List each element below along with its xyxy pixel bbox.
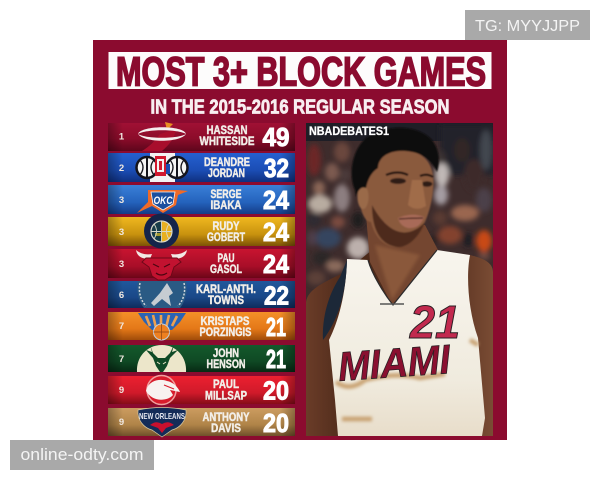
row 2: DeAndre Jordan: 2 bbox=[119, 163, 124, 174]
icon: New Orleans Pelicans logo: NEW ORLEANS bbox=[139, 411, 185, 421]
row 10: Anthony Davis: 9 bbox=[119, 417, 124, 428]
row 8: John Henson: JOHN bbox=[213, 348, 239, 360]
icon: Miami Heat logo bbox=[138, 122, 186, 151]
icon: LA Clippers logo bbox=[136, 153, 188, 182]
row 1: Hassan Whiteside: 1 bbox=[119, 132, 125, 142]
row 2: DeAndre Jordan bbox=[108, 153, 295, 183]
icon: Minnesota Timberwolves logo bbox=[137, 281, 187, 308]
icon: Utah Jazz logo bbox=[144, 214, 179, 248]
row 5: Pau Gasol: 3 bbox=[119, 259, 124, 270]
row 9: Paul Millsap: 20 bbox=[263, 378, 289, 406]
row 6: Karl-Anthony Towns: 6 bbox=[119, 290, 124, 301]
row 4: Rudy Gobert: GOBERT bbox=[207, 232, 245, 244]
row 7: Kristaps Porzingis: 7 bbox=[119, 321, 124, 332]
row 4: Rudy Gobert bbox=[108, 214, 295, 248]
row 6: Karl-Anthony Towns bbox=[108, 281, 295, 310]
row 9: Paul Millsap bbox=[108, 376, 295, 406]
panel: crimson poster background bbox=[93, 40, 507, 440]
row 10: Anthony Davis: 20 bbox=[263, 410, 289, 438]
row 9: Paul Millsap: PAUL bbox=[213, 379, 239, 391]
row 4: Rudy Gobert: RUDY bbox=[212, 221, 240, 233]
icon: New York Knicks logo bbox=[138, 313, 186, 340]
subtitle: IN THE 2015-2016 REGULAR SEASON bbox=[150, 96, 450, 118]
icon: New Orleans Pelicans logo bbox=[138, 408, 186, 437]
player hair bbox=[352, 128, 439, 197]
icon: Atlanta Hawks logo bbox=[146, 376, 180, 404]
row 7: Kristaps Porzingis bbox=[108, 312, 295, 342]
row 8: John Henson: 21 bbox=[266, 346, 286, 374]
row 3: Serge Ibaka: IBAKA bbox=[210, 200, 242, 212]
row 1: Hassan Whiteside: HASSAN bbox=[206, 125, 248, 137]
row 4: Rudy Gobert: 3 bbox=[119, 227, 124, 238]
watermark: bottom left bbox=[10, 440, 154, 470]
row 3: Serge Ibaka: 24 bbox=[263, 187, 290, 215]
row 2: DeAndre Jordan: 32 bbox=[264, 155, 289, 183]
icon: Oklahoma City Thunder logo: OKC bbox=[154, 195, 173, 207]
row 10: Anthony Davis: DAVIS bbox=[211, 423, 241, 435]
row 10: Anthony Davis: ANTHONY bbox=[202, 412, 250, 424]
watermark: top right bbox=[465, 10, 590, 40]
row 6: Karl-Anthony Towns: 22 bbox=[264, 282, 289, 310]
player body and arms bbox=[306, 215, 493, 436]
row 8: John Henson: 7 bbox=[119, 354, 124, 365]
row 3: Serge Ibaka bbox=[108, 185, 295, 215]
watermark: top right: TG: MYYJJPP bbox=[475, 18, 580, 35]
row 8: John Henson: HENSON bbox=[206, 359, 246, 371]
row 6: Karl-Anthony Towns: TOWNS bbox=[208, 295, 244, 307]
row 5: Pau Gasol: GASOL bbox=[210, 264, 242, 276]
row 2: DeAndre Jordan: JORDAN bbox=[208, 168, 245, 180]
white Miami jersey bbox=[323, 250, 485, 436]
row 5: Pau Gasol: PAU bbox=[218, 253, 234, 265]
row 4: Rudy Gobert: 24 bbox=[263, 219, 290, 247]
jersey wordmark MIAMI: MIAMI bbox=[337, 336, 453, 390]
row 9: Paul Millsap: 9 bbox=[119, 385, 124, 396]
row 9: Paul Millsap: MILLSAP bbox=[205, 390, 247, 402]
photo credit: NBADEBATES1 bbox=[309, 124, 389, 138]
panel: player photo bbox=[306, 123, 495, 436]
row 1: Hassan Whiteside bbox=[108, 122, 295, 152]
crowd background bbox=[306, 123, 493, 302]
row 5: Pau Gasol: 24 bbox=[263, 251, 290, 279]
row 3: Serge Ibaka: SERGE bbox=[210, 189, 242, 201]
row 1: Hassan Whiteside: WHITESIDE bbox=[200, 136, 255, 148]
row 8: John Henson bbox=[108, 345, 295, 374]
watermark: bottom left: online-odty.com bbox=[20, 446, 144, 464]
icon: Chicago Bulls logo bbox=[136, 250, 187, 280]
row 7: Kristaps Porzingis: KRISTAPS bbox=[200, 316, 250, 328]
icon: Oklahoma City Thunder logo bbox=[137, 190, 188, 213]
icon: Milwaukee Bucks logo bbox=[137, 345, 186, 372]
row 1: Hassan Whiteside: 49 bbox=[262, 124, 290, 152]
row 3: Serge Ibaka: 3 bbox=[119, 195, 124, 206]
panel: ranking list bbox=[108, 122, 295, 438]
title banner: MOST 3+ BLOCK GAMES bbox=[116, 48, 486, 94]
row 5: Pau Gasol bbox=[108, 249, 295, 280]
row 10: Anthony Davis bbox=[108, 408, 295, 438]
jersey number 21: 21 bbox=[409, 296, 460, 348]
row 6: Karl-Anthony Towns: KARL-ANTH. bbox=[196, 284, 256, 296]
row 7: Kristaps Porzingis: 21 bbox=[266, 314, 286, 342]
row 2: DeAndre Jordan: DEANDRE bbox=[204, 157, 250, 169]
row 7: Kristaps Porzingis: PORZINGIS bbox=[200, 327, 252, 339]
player head bbox=[352, 128, 439, 247]
